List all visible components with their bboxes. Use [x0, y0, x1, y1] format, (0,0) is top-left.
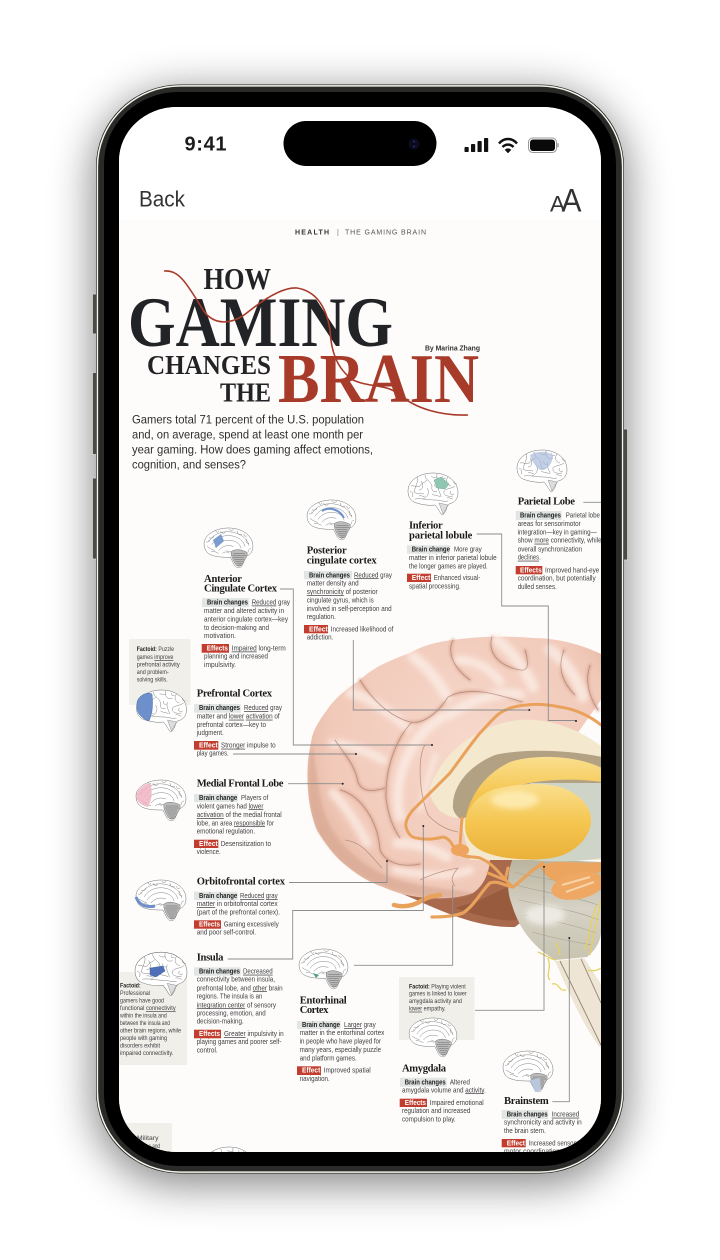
panel: insula factoid — [119, 983, 181, 1057]
clipped factoid at bottom: Military — [137, 1135, 159, 1142]
panel: medial frontal lobe: Effect — [199, 840, 218, 848]
heading: OFC: Orbitofrontal cortex — [197, 877, 286, 888]
panel: anterior cingulate cortex: planning and increased — [204, 652, 268, 660]
panel: parietal lobe — [516, 450, 602, 591]
clipped factoid at bottom: games and — [137, 1143, 160, 1150]
panel: amygdala: amygdala volume and activity. — [402, 1085, 486, 1094]
heading: IPL: parietal lobule — [409, 530, 473, 541]
clipped brain icon at bottom — [204, 1147, 254, 1189]
panel: medial frontal lobe: emotional regulation. — [197, 827, 255, 836]
panel: prefrontal factoid: prefrontal activity — [137, 662, 180, 668]
heading: amygdala: Amygdala — [402, 1064, 447, 1075]
panel: brainstem: Brain changes — [507, 1111, 548, 1119]
panel: medial frontal lobe: violence. — [197, 847, 221, 856]
panel: parietal lobe: Brain changes — [520, 512, 561, 520]
title: CHANGES — [147, 350, 271, 380]
panel: insula: connectivity between insula, — [197, 975, 275, 984]
panel: amygdala: Impaired emotional — [430, 1098, 484, 1107]
icon: MFL brain — [136, 780, 186, 821]
title: BRAIN — [278, 341, 479, 418]
panel: orbitofrontal cortex: and poor self-control. — [197, 928, 256, 937]
panel: prefrontal cortex: matter and lower activation of — [197, 712, 280, 721]
panel: insula: decision-making. — [197, 1017, 244, 1026]
amygdala factoid text — [409, 983, 467, 1013]
cerebrum — [307, 637, 601, 898]
brown band beneath callosum — [453, 751, 602, 820]
text size control: A — [550, 192, 565, 217]
panel: anterior cingulate cortex: motivation. — [204, 631, 236, 640]
yellow nerves — [538, 900, 601, 990]
panel: orbitofrontal cortex: Reduced gray — [240, 891, 278, 900]
panel: prefrontal cortex: Brain changes — [199, 704, 240, 712]
panel: parietal lobe: Effects — [520, 566, 542, 574]
back link: Back — [139, 187, 186, 212]
intro paragraph: Gamers total 71 percent of the U.S. population — [132, 412, 364, 426]
panel: brainstem: Increased sensory — [529, 1138, 579, 1147]
clock: 9:41 — [184, 134, 228, 156]
orange fornix — [394, 704, 601, 917]
panel: anterior cingulate cortex: Effects — [207, 644, 228, 652]
panel: inferior parietal lobule: spatial processing. — [409, 581, 461, 590]
panel: inferior parietal lobule: More gray — [454, 545, 482, 554]
heading: brainstem: Brainstem — [504, 1096, 549, 1107]
amygdala factoid text: Factoid: Playing violent — [409, 983, 466, 990]
panel: anterior cingulate cortex: anterior cingulate cortex—key — [204, 614, 288, 624]
heading: PCC: Posterior — [307, 545, 347, 556]
panel: insula: Effects — [199, 1030, 220, 1038]
panel: insula factoid: Professional — [120, 990, 150, 997]
panel: amygdala: Altered — [450, 1077, 470, 1086]
icon: parietal brain — [517, 450, 567, 492]
article page background — [119, 1098, 601, 1152]
panel: parietal lobe: coordination, but potentially — [518, 573, 596, 582]
panel: medial frontal lobe: activation of the medial frontal — [197, 810, 282, 819]
corpus callosum — [430, 720, 602, 860]
panel: insula factoid: disorders exhibit — [120, 1042, 160, 1049]
panel: amygdala — [400, 983, 486, 1124]
amygdala factoid text: amygdala activity and — [409, 998, 462, 1005]
icon: insula brain — [135, 952, 187, 996]
intro paragraph: cognition, and senses? — [132, 458, 246, 472]
panel: parietal lobe: Parietal lobe — [566, 511, 600, 520]
panel: prefrontal cortex: play games. — [197, 748, 229, 758]
panel: insula: Greater impulsivity in — [224, 1029, 284, 1038]
panel: entorhinal cortex: and platform games. — [300, 1053, 357, 1062]
panel: parietal lobe: show more connectivity, while — [518, 536, 602, 545]
heading: ACC: Cingulate Cortex — [204, 584, 278, 595]
brain underside — [402, 860, 520, 927]
gyri highlights — [333, 640, 583, 875]
panel: brainstem: Increased — [552, 1110, 579, 1119]
panel: inferior parietal lobule: matter in inferior parietal lobule — [409, 553, 497, 562]
text size control — [550, 183, 582, 219]
panel: posterior cingulate cortex: involved in self-perception and — [307, 604, 392, 613]
heading: prefrontal: Prefrontal Cortex — [197, 689, 273, 700]
icon: entorhinal brain — [299, 949, 348, 989]
panel: entorhinal cortex: Larger gray — [344, 1020, 376, 1029]
heading: parietal: Parietal Lobe — [518, 497, 575, 508]
title: GAMING — [128, 284, 393, 362]
panel: posterior cingulate cortex: Reduced gray — [354, 570, 392, 579]
left side buttons — [92, 294, 628, 560]
panel: medial frontal lobe: Brain change — [199, 794, 237, 802]
panel: brainstem: Effect — [507, 1139, 526, 1147]
panel: insula factoid: gamers have good — [120, 997, 164, 1004]
panel: insula factoid: impaired connectivity. — [120, 1050, 173, 1057]
panel: entorhinal cortex: Improved spatial — [324, 1066, 371, 1075]
panel: anterior cingulate cortex: Reduced gray — [252, 598, 290, 606]
intro paragraph — [132, 412, 373, 472]
panel: orbitofrontal cortex — [136, 877, 286, 937]
title — [128, 261, 479, 418]
cerebellum — [508, 858, 601, 960]
status and navigation bar — [119, 107, 601, 220]
panel: insula: Brain changes — [199, 968, 240, 976]
panel: prefrontal factoid: games improve — [137, 654, 174, 661]
panel: insula factoid: within the insula and — [119, 1012, 167, 1019]
panel: insula: prefrontal lobe, and other brain — [197, 983, 283, 992]
panel: prefrontal factoid: solving skills. — [137, 676, 168, 684]
panel: inferior parietal lobule: Enhanced visual- — [434, 573, 481, 582]
panel: parietal lobe: dulled senses. — [518, 582, 557, 591]
panel: posterior cingulate cortex: Increased likelihood of — [331, 624, 393, 633]
panel: parietal lobe: integration—key in gaming— — [518, 527, 597, 536]
section header: THE GAMING BRAIN — [345, 230, 426, 236]
panel: parietal lobe: overall synchronization — [518, 544, 582, 553]
panel: insula: processing, emotion, and — [197, 1009, 266, 1018]
panel: medial frontal lobe: Players of — [241, 793, 268, 802]
icon: PCC brain — [307, 500, 356, 540]
panel: brainstem: the brain stem. — [504, 1126, 546, 1135]
icon: OFC brain — [136, 880, 186, 921]
panel: inferior parietal lobule: Brain change — [412, 546, 450, 554]
panel: parietal lobe: Improved hand-eye — [545, 565, 599, 574]
grey-green thalamus backdrop — [530, 783, 602, 861]
byline: By Marina Zhang — [425, 346, 480, 352]
panel: anterior cingulate cortex: Impaired long-term — [232, 644, 286, 652]
panel: brainstem: motor coordination — [504, 1146, 560, 1156]
panel: orbitofrontal cortex: Gaming excessively — [224, 920, 279, 929]
icon: ACC brain — [204, 528, 253, 568]
panel: prefrontal cortex: Effect — [199, 742, 218, 750]
panel: insula factoid: functional connectivity — [120, 1005, 176, 1012]
clipped factoid at bottom — [137, 1135, 160, 1150]
panel: entorhinal cortex: in people who have played for — [300, 1037, 382, 1046]
panel: posterior cingulate cortex — [304, 500, 393, 641]
panel: entorhinal cortex — [297, 949, 385, 1083]
panel: medial frontal lobe: violent games had lower — [197, 801, 264, 810]
orange pons — [540, 862, 601, 882]
section header: | — [337, 230, 339, 236]
panel: insula factoid: Factoid: — [120, 983, 141, 990]
battery icon — [528, 138, 556, 152]
panel: posterior cingulate cortex: matter density and — [307, 579, 359, 588]
panel: entorhinal cortex: many years, especially puzzle — [300, 1045, 381, 1054]
intro paragraph: year gaming. How does gaming affect emotions, — [132, 442, 373, 456]
panel: anterior cingulate cortex: Brain changes — [207, 598, 248, 606]
panel: insula factoid: other brain regions, while — [120, 1027, 181, 1034]
leader lines — [228, 502, 602, 1102]
heading: MFL: Medial Frontal Lobe — [197, 779, 284, 790]
panel: entorhinal cortex: Brain change — [302, 1021, 340, 1029]
title: HOW — [204, 261, 271, 296]
icon: prefrontal brain — [136, 690, 186, 732]
panel: medial frontal lobe: Desensitization to — [221, 839, 271, 848]
yellow thalamus — [465, 784, 591, 860]
icon: brainstem brain — [503, 1051, 553, 1092]
amygdala factoid text: lower empathy. — [409, 1006, 446, 1013]
panel: posterior cingulate cortex: addiction. — [307, 632, 333, 641]
panel: posterior cingulate cortex: Brain changes — [309, 571, 350, 579]
section header — [295, 230, 426, 236]
panel: brainstem: synchronicity and activity in — [504, 1118, 582, 1127]
panel: inferior parietal lobule: Effect — [412, 574, 431, 582]
heading: entorhinal — [300, 995, 347, 1016]
signal bars — [464, 138, 488, 152]
panel: orbitofrontal cortex: matter in orbitofrontal cortex — [197, 899, 278, 908]
panel: parietal lobe: areas for sensorimotor — [518, 519, 581, 528]
gyri shadows — [335, 637, 598, 865]
panel: parietal lobe: declines. — [518, 553, 541, 562]
factoid box backgrounds — [119, 639, 474, 1163]
heading: insula: Insula — [197, 953, 224, 964]
heading: ACC: Anterior — [204, 574, 242, 585]
panel: brainstem — [502, 1051, 582, 1156]
heading: PCC: cingulate cortex — [307, 555, 377, 566]
panel: medial frontal lobe — [136, 779, 284, 856]
heading: entorhinal: Entorhinal — [300, 995, 347, 1006]
panel: entorhinal cortex: Effect — [302, 1067, 321, 1075]
icon: amygdala brain — [409, 1018, 457, 1057]
brainstem column — [555, 958, 601, 1048]
panel: prefrontal cortex — [136, 689, 282, 758]
panel: amygdala: Brain changes — [405, 1078, 446, 1086]
panel: prefrontal factoid: and problem- — [137, 669, 169, 676]
panel: anterior cingulate cortex: to decision-making and — [204, 623, 269, 632]
dynamic island — [284, 121, 436, 166]
panel: medial frontal lobe: lobe, an area responsible for — [197, 818, 275, 827]
anatomical brain illustration — [307, 637, 607, 1048]
panel: anterior cingulate cortex: matter and altered activity in — [204, 606, 284, 615]
heading: IPL: Inferior — [409, 520, 443, 531]
panel: insula factoid: people with gaming — [120, 1035, 167, 1042]
panel: prefrontal cortex: Stronger impulse to — [221, 741, 276, 750]
phone frame — [92, 84, 628, 1174]
section header: HEALTH — [295, 230, 329, 236]
panel: posterior cingulate cortex: Effect — [309, 625, 328, 633]
wifi icon — [499, 139, 517, 147]
panel: prefrontal factoid: Factoid: Puzzle — [137, 646, 174, 653]
panel: orbitofrontal cortex: Effects — [199, 921, 220, 929]
phone drop shadow — [96, 85, 624, 1173]
panel: prefrontal cortex: judgment. — [196, 728, 224, 737]
panel: inferior parietal lobule: the longer games are played. — [409, 561, 488, 570]
heading: PCC — [307, 545, 377, 566]
panel: insula: regions. The insula is an — [197, 992, 262, 1001]
panel: prefrontal cortex: prefrontal cortex—key to — [197, 720, 266, 729]
panel: insula: playing games and poorer self- — [197, 1037, 282, 1046]
panel: posterior cingulate cortex: regulation. — [307, 612, 336, 621]
panel: entorhinal cortex: matter in the entorhinal cortex — [300, 1028, 385, 1037]
panel: inferior parietal lobule — [407, 473, 497, 590]
amygdala factoid text: games is linked to lower — [409, 991, 467, 998]
heading: entorhinal: Cortex — [300, 1005, 329, 1016]
sulci — [335, 637, 598, 886]
panel: amygdala: regulation and increased — [402, 1106, 470, 1115]
panel: insula factoid: between the insula and — [120, 1020, 170, 1027]
panel: anterior cingulate cortex: impulsivity. — [204, 660, 236, 669]
panel: insula: control. — [197, 1046, 218, 1055]
icon: IPL brain — [408, 473, 458, 515]
title: THE — [220, 378, 271, 408]
heading: IPL — [409, 520, 473, 541]
text size control: A — [562, 183, 582, 219]
panel: amygdala: Effects — [405, 1099, 426, 1107]
panel: orbitofrontal cortex: (part of the prefrontal cortex). — [197, 907, 280, 916]
panel: entorhinal cortex: navigation. — [300, 1074, 330, 1083]
panel: orbitofrontal cortex: Brain change — [199, 892, 237, 900]
intro paragraph: and, on average, spend at least one month per — [132, 428, 363, 442]
yellow caudate arc — [465, 756, 601, 822]
panel: prefrontal cortex: Reduced gray — [244, 703, 282, 712]
panel: prefrontal factoid — [137, 646, 180, 684]
panel: insula: Decreased — [243, 967, 273, 976]
panel: posterior cingulate cortex: synchronicity of posterior — [307, 587, 378, 596]
panel: posterior cingulate cortex: cingulate gyrus, which is — [307, 595, 374, 604]
heading: ACC — [204, 574, 278, 595]
panel: insula: integration center of sensory — [197, 1000, 276, 1009]
panel: amygdala: compulsion to play. — [402, 1115, 456, 1124]
panel: insula — [135, 952, 284, 1055]
panel: anterior cingulate cortex — [202, 528, 290, 669]
